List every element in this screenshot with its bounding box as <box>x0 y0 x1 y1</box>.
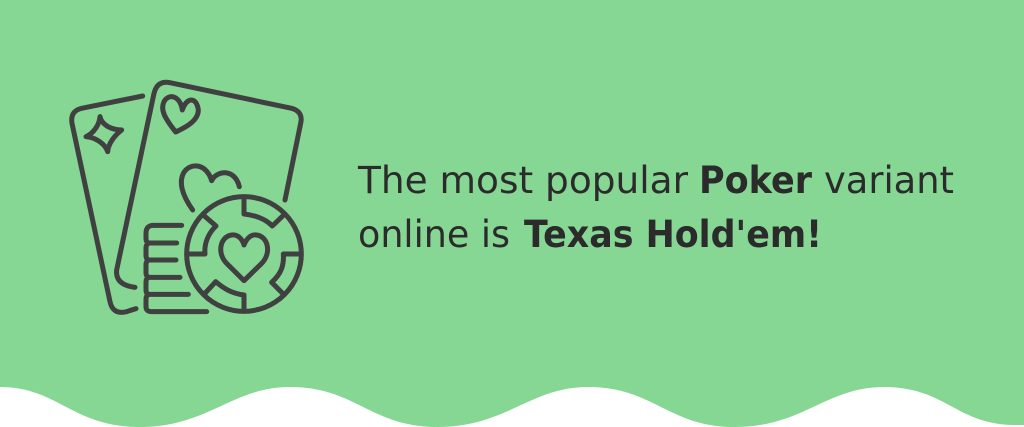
icon: diamond <box>86 117 122 152</box>
icon: partial centre heart <box>181 166 239 210</box>
white wave footer <box>0 387 1024 427</box>
headline text <box>357 158 954 256</box>
headline line 1: variant <box>824 158 954 202</box>
icon: small heart <box>163 97 198 132</box>
headline line 2: Texas Hold'em! <box>524 212 822 256</box>
icon: front card <box>117 82 301 287</box>
icon: back card <box>72 96 143 312</box>
icon: playing cards and poker chips <box>72 82 301 312</box>
icon: chip stack <box>146 225 207 312</box>
headline line 1: Poker <box>699 158 812 202</box>
headline line 1: The most popular <box>357 158 689 202</box>
icon: poker chip <box>187 197 301 311</box>
headline line 2: online is <box>358 212 510 256</box>
